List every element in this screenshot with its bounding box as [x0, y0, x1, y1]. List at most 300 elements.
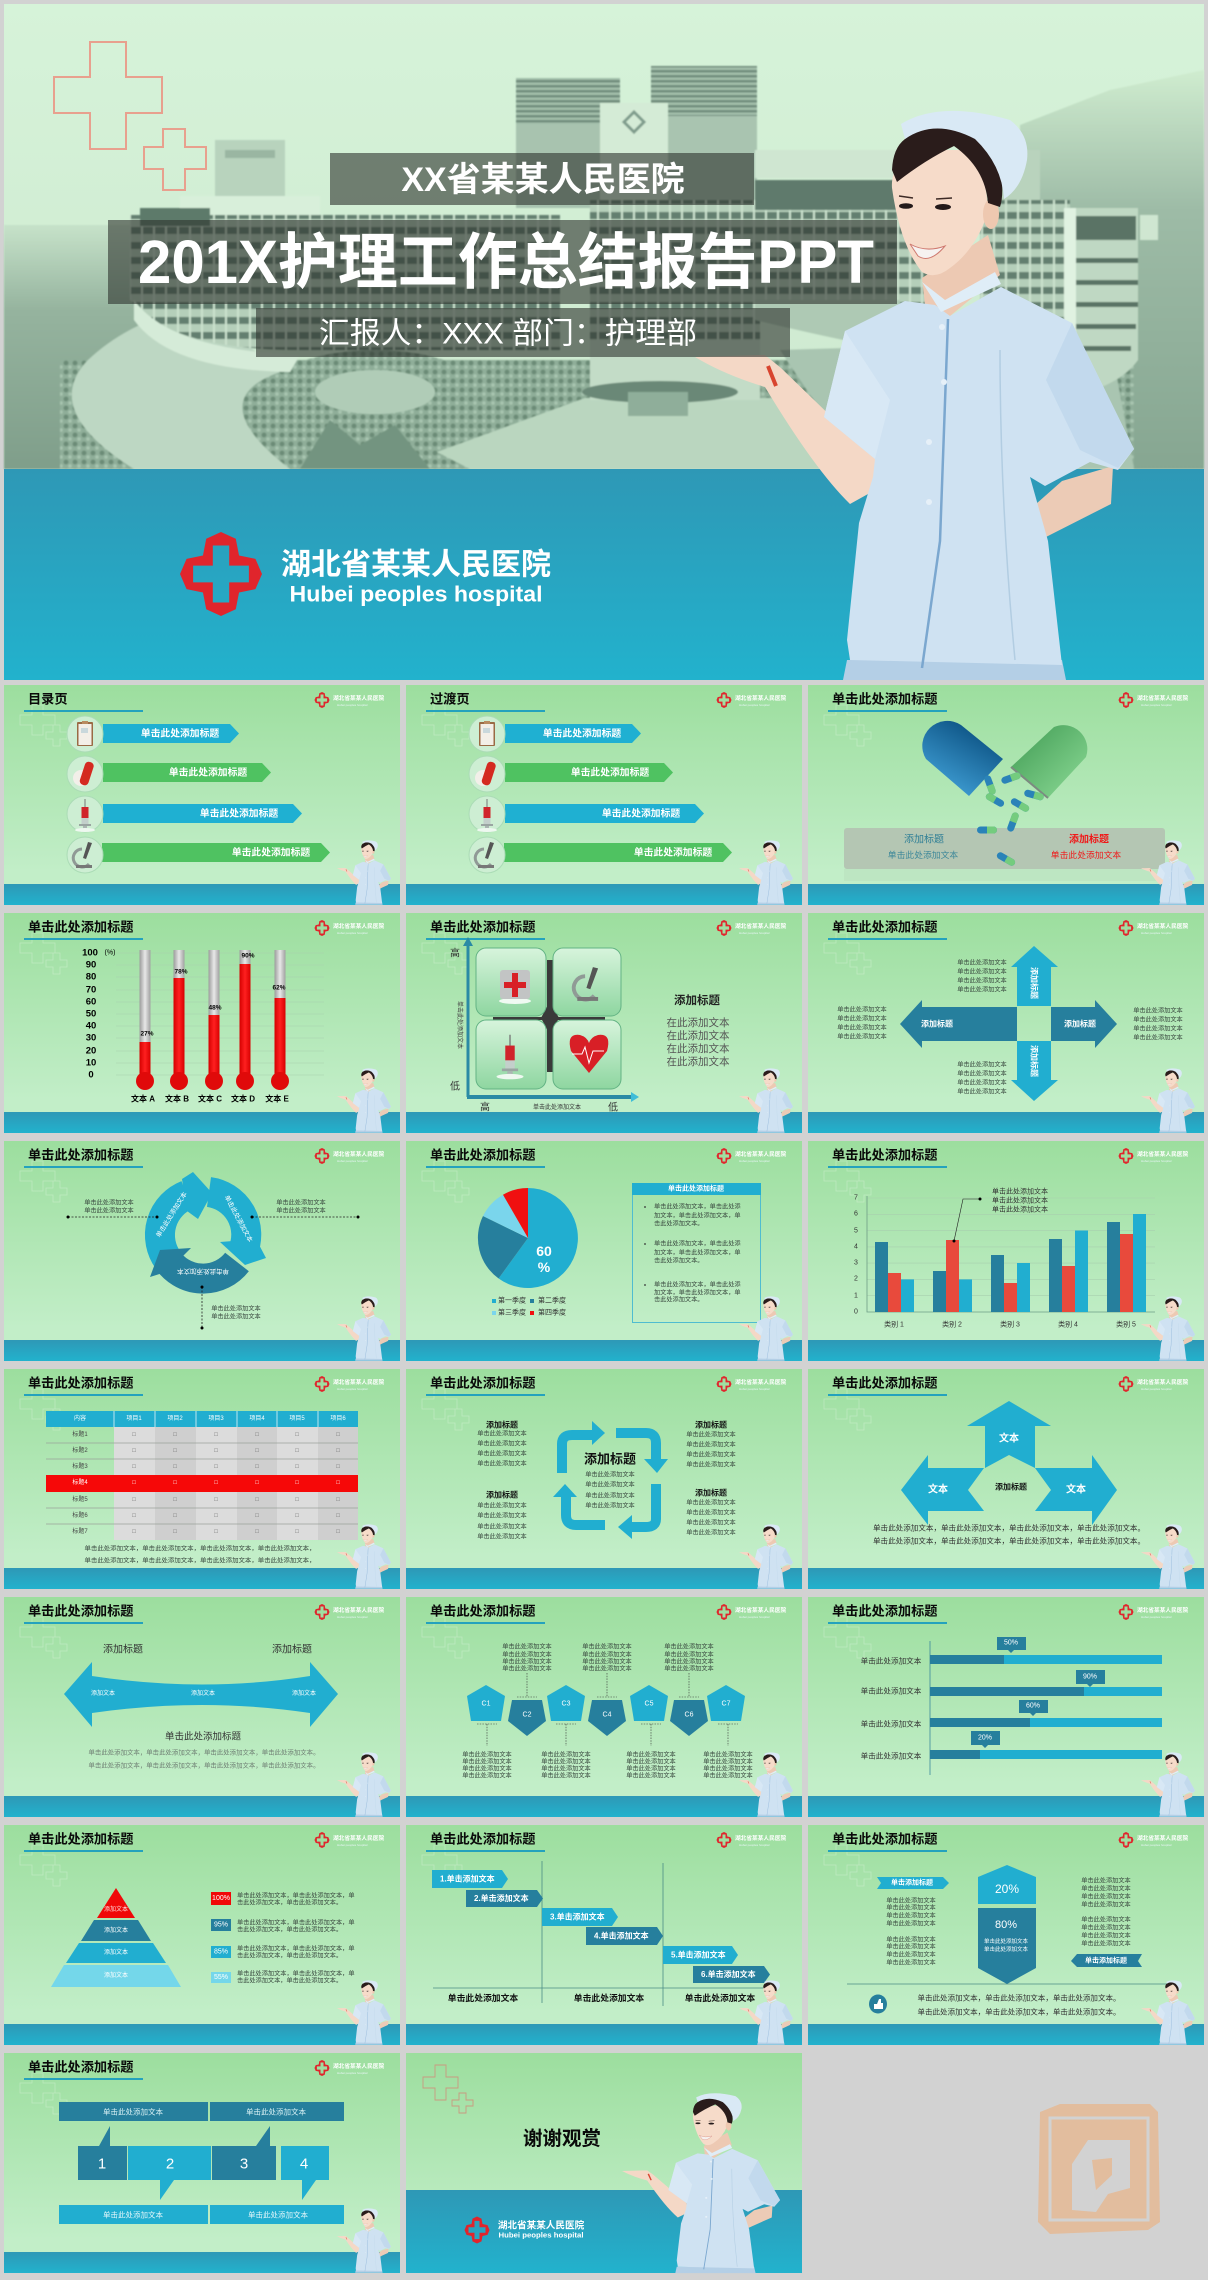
arrow down: 添加标题: [1030, 1045, 1040, 1077]
thank you text: 谢谢观赏: [523, 2127, 601, 2150]
block 4: 4: [300, 2156, 308, 2172]
thermometer D: 90%: [241, 952, 255, 960]
title: 单击此处添加标题: [28, 1146, 134, 1162]
item 95%: [211, 1918, 355, 1934]
lower texts: 单击此处添加文本: [626, 1750, 676, 1758]
logo: [314, 1604, 384, 1620]
text bottom left: 单击此处添加文本: [477, 1522, 527, 1530]
axis labels: 70: [86, 984, 96, 996]
table: □: [132, 1464, 136, 1470]
text panel: 单击此处添加文本: [888, 849, 958, 860]
caption: 单击此处添加标题: [165, 1730, 241, 1742]
logo: Hubei peoples hospital: [739, 1159, 770, 1163]
text top left: 单击此处添加文本: [477, 1460, 527, 1468]
axis labels: (%): [105, 950, 115, 956]
side text: [666, 993, 730, 1068]
hospital logo: 湖北省某某人民医院: [281, 548, 551, 582]
item 55%: 单击此处添加文本，单击此处添加文本，单: [237, 1970, 355, 1978]
step 2: 2.单击添加文本: [474, 1893, 529, 1903]
chart: [854, 1194, 1155, 1328]
text left: 单击此处添加文本: [837, 1024, 887, 1032]
three arrows: 文本: [1066, 1482, 1086, 1496]
label box: province hospital: [330, 153, 754, 205]
logo: 湖北省某某人民医院: [333, 2062, 384, 2070]
side text: 在此添加文本: [666, 1029, 730, 1042]
title: 单击此处添加标题: [832, 1146, 938, 1162]
text bottom right: 单击此处添加文本: [686, 1498, 736, 1506]
legend: 第一季度: [498, 1296, 526, 1304]
slide 6: four-way arrows: [808, 913, 1204, 1133]
upper texts: 单击此处添加文本: [582, 1658, 632, 1666]
item 100%: [211, 1892, 355, 1906]
table: □: [214, 1432, 218, 1438]
text box: 击此处添加文本。: [654, 1296, 704, 1304]
text bottom left: 单击此处添加文本: [477, 1512, 527, 1520]
lower texts: 单击此处添加文本: [626, 1764, 676, 1772]
reporter line: 汇报人：XXX 部门：护理部: [319, 318, 697, 350]
table: □: [295, 1432, 299, 1438]
hospital logo: [464, 2216, 585, 2244]
note text: 单击此处添加文本，单击此处添加文本，单击此处添加文本，单击此处添加文本，: [84, 1556, 316, 1564]
logo: 湖北省某某人民医院: [735, 1150, 786, 1158]
logo: 湖北省某某人民医院: [1137, 1150, 1188, 1158]
logo: 湖北省某某人民医院: [735, 1378, 786, 1386]
axis labels: 80: [86, 972, 96, 982]
right tag and text: 单击此处添加文本: [1081, 1884, 1131, 1892]
axis labels: [82, 948, 115, 1080]
table: 标题7: [72, 1527, 88, 1535]
center text: 单击此处添加文本: [585, 1470, 635, 1478]
logo: 湖北省某某人民医院: [333, 1378, 384, 1386]
cycle arrows: 单击此处添加文本: [154, 1190, 189, 1239]
logo: 湖北省某某人民医院: [735, 694, 786, 702]
table: □: [295, 1448, 299, 1454]
nurse: [739, 1296, 793, 1361]
thermometer C: 文本 C: [198, 1094, 222, 1104]
table: 内容: [74, 1414, 86, 1422]
lower texts: 单击此处添加文本: [462, 1772, 512, 1780]
nurse: [739, 1524, 793, 1589]
table: □: [295, 1529, 299, 1535]
slide 2: transition: [406, 685, 802, 905]
slide 10: table: [4, 1369, 400, 1589]
slide 20: thank you: [406, 2053, 802, 2273]
step 5: [663, 1946, 738, 1964]
cycle arrows: [150, 1172, 266, 1279]
top bars: [59, 2102, 344, 2121]
nurse: [337, 1296, 391, 1361]
nurse photo: [695, 111, 1134, 680]
center block: 单击此处添加文本: [984, 1937, 1028, 1945]
right tag and text: 单击此处添加文本: [1081, 1892, 1131, 1900]
table: □: [132, 1480, 136, 1486]
lower texts: 单击此处添加文本: [703, 1772, 753, 1780]
logo: Hubei peoples hospital: [739, 1843, 770, 1847]
logo: [314, 1376, 384, 1392]
center block: 80%: [995, 1919, 1017, 1931]
logo: Hubei peoples hospital: [739, 1615, 770, 1619]
text top left: 添加标题: [486, 1420, 518, 1430]
item 95%: 单击此处添加文本，单击此处添加文本，单: [237, 1918, 355, 1926]
table: □: [132, 1529, 136, 1535]
logo: 湖北省某某人民医院: [1137, 1378, 1188, 1386]
block 1: 1: [98, 2156, 106, 2172]
text box: 加文本，单击此处添加文本，单: [654, 1212, 741, 1220]
text bottom: 单击此处添加文本: [957, 1088, 1007, 1096]
arrow down: [1011, 1041, 1058, 1101]
upper texts: 单击此处添加文本: [664, 1658, 714, 1666]
left tag and text: [877, 1877, 949, 1966]
logo: 湖北省某某人民医院: [735, 1606, 786, 1614]
block 3: [212, 2126, 276, 2180]
text bottom: 单击此处添加文本: [957, 1070, 1007, 1078]
title: 单击此处添加标题: [430, 918, 536, 934]
item 95%: 95%: [214, 1922, 228, 1928]
hospital logo: 湖北省某某人民医院: [498, 2220, 585, 2232]
step 6: [693, 1966, 770, 1983]
logo: Hubei peoples hospital: [1141, 1387, 1172, 1391]
column labels: 单击此处添加文本: [448, 1992, 518, 2003]
bottom bars: 单击此处添加文本: [248, 2210, 308, 2220]
step 6: 6.单击添加文本: [701, 1969, 756, 1979]
text top right: 单击此处添加文本: [686, 1450, 736, 1458]
slide 14: pentagons: [406, 1597, 802, 1817]
table: □: [295, 1464, 299, 1470]
text panel: [844, 828, 1165, 881]
three arrows: 文本: [928, 1482, 948, 1496]
lower texts: 单击此处添加文本: [626, 1772, 676, 1780]
axis labels: 40: [86, 1020, 96, 1032]
table: 标题5: [72, 1495, 88, 1503]
item 100%: 单击此处添加文本，单击此处添加文本，单: [237, 1892, 355, 1900]
bar 90%: 单击此处添加文本: [861, 1686, 922, 1696]
icon: heart: [570, 1035, 608, 1073]
upper texts: 单击此处添加文本: [582, 1650, 632, 1658]
logo: Hubei peoples hospital: [337, 1387, 368, 1391]
nurse: [739, 1068, 793, 1133]
logo: [1118, 1376, 1188, 1392]
text top left: 单击此处添加文本: [477, 1450, 527, 1458]
logo: 湖北省某某人民医院: [735, 922, 786, 930]
logo: Hubei peoples hospital: [337, 2071, 368, 2075]
title: 单击此处添加标题: [430, 1146, 536, 1162]
item 100%: 击此处添加文本，单击此处添加文本。: [237, 1898, 342, 1906]
callout: 单击此处添加文本: [992, 1196, 1048, 1204]
center block: [978, 1865, 1036, 1984]
logo: [1118, 692, 1188, 708]
label box: province hospital: XX省某某人民医院: [401, 161, 685, 199]
three arrows: [901, 1401, 1117, 1525]
right tag and text: 单击此处添加文本: [1081, 1932, 1131, 1940]
menu item 2: [67, 756, 271, 792]
text bottom left: 单击此处添加文本: [477, 1532, 527, 1540]
menu item 1: [67, 716, 239, 752]
step 1: 1.单击添加文本: [440, 1874, 495, 1884]
text bottom right: 添加标题: [695, 1488, 727, 1498]
logo: Hubei peoples hospital: [1141, 703, 1172, 707]
center label: 添加标题: [995, 1482, 1027, 1492]
logo: [314, 1148, 384, 1164]
slide 13: double arrow: [4, 1597, 400, 1817]
left tag and text: 单击添加标题: [891, 1878, 933, 1886]
chart: 6: [854, 1210, 858, 1218]
axes: 单击此处添加文本: [533, 1103, 581, 1111]
legend: 第四季度: [538, 1308, 566, 1316]
body text: 单击此处添加文本，单击此处添加文本，单击此处添加文本，单击此处添加文本。: [873, 1522, 1145, 1532]
capsule halves: [922, 721, 1087, 798]
logo: 湖北省某某人民医院: [333, 922, 384, 930]
table: □: [214, 1448, 218, 1454]
slide 18: percentage blocks: [808, 1825, 1204, 2045]
legend: [492, 1296, 566, 1316]
table: 标题6: [72, 1511, 88, 1519]
nurse: [1141, 840, 1195, 905]
arrow right: [1051, 1000, 1117, 1048]
text bottom: 单击此处添加文本: [957, 1078, 1007, 1086]
table: 项目2: [167, 1415, 183, 1422]
bar 90%: 90%: [1083, 1674, 1097, 1680]
hospital logo: Hubei peoples hospital: [290, 582, 542, 606]
hero background: [4, 4, 1204, 469]
lower texts: 单击此处添加文本: [703, 1750, 753, 1758]
pyramid: 添加文本: [104, 1926, 128, 1934]
logo: [314, 1832, 384, 1848]
bar 50%: 50%: [1004, 1640, 1018, 1646]
logo: 湖北省某某人民医院: [333, 1150, 384, 1158]
table: □: [132, 1513, 136, 1519]
axes: 单击此处添加文本: [456, 1001, 464, 1049]
text top: 单击此处添加文本: [957, 986, 1007, 994]
axes: 高: [480, 1100, 490, 1114]
logo: 湖北省某某人民医院: [1137, 1606, 1188, 1614]
item 85%: 单击此处添加文本，单击此处添加文本，单: [237, 1944, 355, 1952]
slide 3: capsule: [808, 685, 1204, 905]
chart: 类别 1: [884, 1320, 904, 1328]
menu item 1: 单击此处添加标题: [141, 726, 219, 740]
slide 15: progress bars: [808, 1597, 1204, 1817]
caption: 单击此处添加文本，单击此处添加文本，单击此处添加文本，单击此处添加文本。: [88, 1748, 320, 1756]
item 55%: 55%: [214, 1974, 228, 1981]
thermometer A: [131, 950, 155, 1104]
chart: 类别 3: [1000, 1320, 1020, 1328]
lower texts: [462, 1750, 753, 1780]
pie: 60: [536, 1243, 552, 1259]
menu item 3: [67, 796, 302, 832]
headings: [103, 1642, 312, 1656]
block 3: 3: [240, 2156, 248, 2172]
matrix tiles: [476, 948, 621, 1089]
bar 90%: [861, 1670, 1162, 1696]
center text: [584, 1452, 636, 1510]
lower texts: 单击此处添加文本: [626, 1758, 676, 1766]
table: □: [336, 1480, 340, 1486]
step 1: [432, 1870, 508, 1888]
logo: 湖北省某某人民医院: [735, 1834, 786, 1842]
curved double arrow: 添加文本: [191, 1689, 215, 1697]
headings: 添加标题: [272, 1642, 312, 1656]
slide 11: four-step loop: [406, 1369, 802, 1589]
title: 单击此处添加标题: [430, 1830, 536, 1846]
table: □: [336, 1432, 340, 1438]
logo: Hubei peoples hospital: [1141, 1843, 1172, 1847]
hero slide: [4, 4, 1204, 680]
bar 20%: 单击此处添加文本: [861, 1750, 922, 1760]
thermometer A: 文本 A: [131, 1094, 155, 1104]
logo: [1118, 1148, 1188, 1164]
text bottom left: 单击此处添加文本: [477, 1502, 527, 1510]
blue band: [406, 2190, 802, 2273]
step 3: 3.单击添加文本: [550, 1912, 605, 1922]
logo: Hubei peoples hospital: [337, 931, 368, 935]
body text: 单击此处添加文本，单击此处添加文本，单击此处添加文本，单击此处添加文本。: [873, 1536, 1145, 1546]
text right: [1133, 1006, 1183, 1042]
callout: 单击此处添加文本: [992, 1186, 1048, 1196]
logo: Hubei peoples hospital: [337, 1843, 368, 1847]
upper texts: 单击此处添加文本: [664, 1650, 714, 1658]
menu item 3: 单击此处添加标题: [602, 806, 680, 820]
axes: 低: [450, 1080, 460, 1092]
table: □: [255, 1513, 259, 1519]
text box: 单击此处添加文本，单击此处添: [654, 1280, 741, 1288]
slide 7: cycle diagram: [4, 1141, 400, 1361]
upper texts: 单击此处添加文本: [502, 1650, 552, 1658]
title: 单击此处添加标题: [28, 1374, 134, 1390]
axes: 低: [608, 1100, 618, 1114]
logo: Hubei peoples hospital: [337, 1615, 368, 1619]
callout texts: 单击此处添加文本: [211, 1304, 261, 1312]
title: 单击此处添加标题: [832, 1602, 938, 1618]
top bars: 单击此处添加文本: [246, 2106, 306, 2116]
thermometer E: 文本 E: [265, 1094, 289, 1104]
callout texts: 单击此处添加文本: [276, 1206, 326, 1214]
lower texts: 单击此处添加文本: [541, 1750, 591, 1758]
lower texts: 单击此处添加文本: [541, 1764, 591, 1772]
upper texts: 单击此处添加文本: [582, 1642, 632, 1650]
logo: Hubei peoples hospital: [739, 703, 770, 707]
axis line: [929, 1641, 931, 1775]
upper texts: 单击此处添加文本: [664, 1664, 714, 1672]
icon: syringe: [496, 1035, 524, 1079]
top bars: 单击此处添加文本: [103, 2106, 163, 2116]
chart: 1: [854, 1292, 858, 1300]
note text: [84, 1544, 316, 1564]
table: □: [336, 1513, 340, 1519]
lower texts: 单击此处添加文本: [703, 1764, 753, 1772]
logo: [314, 2060, 384, 2076]
title: 单击此处添加标题: [832, 918, 938, 934]
title: 单击此处添加标题: [28, 918, 134, 934]
table: □: [336, 1464, 340, 1470]
text top right: 单击此处添加文本: [686, 1440, 736, 1448]
item 85%: 85%: [214, 1948, 228, 1956]
nurse: [337, 1068, 391, 1133]
text top right: 单击此处添加文本: [686, 1430, 736, 1438]
axis labels: 100: [82, 948, 98, 958]
slide 9: bar chart: [808, 1141, 1204, 1361]
thermometer E: [265, 950, 289, 1104]
table: □: [173, 1497, 177, 1503]
bar 60%: [861, 1700, 1162, 1728]
pyramid: 添加文本: [104, 1971, 128, 1979]
table: 项目5: [289, 1415, 305, 1422]
menu item 4: 单击此处添加标题: [634, 846, 712, 858]
upper texts: 单击此处添加文本: [502, 1658, 552, 1666]
thermometer B: [165, 950, 189, 1104]
arrow up: [1011, 946, 1058, 1006]
table: □: [214, 1497, 218, 1503]
leader lines: [66, 1216, 360, 1330]
logo: [1118, 920, 1188, 936]
step 4: 4.单击添加文本: [594, 1930, 649, 1940]
table: □: [255, 1448, 259, 1454]
menu item 2: [469, 756, 673, 792]
menu item 1: [469, 716, 641, 752]
text bottom right: [686, 1488, 736, 1536]
callout: 单击此处添加文本: [992, 1204, 1048, 1214]
lower texts: 单击此处添加文本: [541, 1772, 591, 1780]
bar 20%: 20%: [978, 1734, 992, 1742]
axes: 高: [450, 946, 460, 960]
text bottom: [957, 1060, 1007, 1096]
center text: 单击此处添加文本: [585, 1502, 635, 1510]
table: □: [173, 1529, 177, 1535]
step 3: [542, 1908, 618, 1926]
table: □: [255, 1497, 259, 1503]
block 4: [281, 2146, 329, 2200]
slide 19: numbered blocks: [4, 2053, 400, 2273]
item 85%: [211, 1944, 355, 1960]
logo: 湖北省某某人民医院: [333, 694, 384, 702]
column labels: 单击此处添加文本: [574, 1992, 644, 2003]
title: 单击此处添加标题: [28, 2058, 134, 2074]
callout: [952, 1186, 1048, 1242]
text box: 加文本，单击此处添加文本，单: [654, 1288, 741, 1296]
center block: 单击此处添加文本: [984, 1945, 1028, 1953]
right tag and text: [1071, 1876, 1142, 1967]
chart: 7: [854, 1194, 858, 1202]
pyramid: 添加文本: [104, 1948, 128, 1956]
text left: 单击此处添加文本: [837, 1032, 887, 1040]
upper texts: 单击此处添加文本: [582, 1664, 632, 1672]
title: 单击此处添加标题: [832, 690, 938, 706]
logo: [314, 692, 384, 708]
pentagons: C4: [603, 1712, 612, 1718]
table: □: [132, 1448, 136, 1454]
axis labels: 50: [86, 1008, 96, 1020]
axis labels: 30: [86, 1032, 96, 1044]
main title: 201X护理工作总结报告PPT: [138, 228, 874, 296]
left tag and text: 单击此处添加文本: [886, 1920, 936, 1928]
body text: [873, 1522, 1145, 1546]
axis labels: 10: [86, 1058, 96, 1068]
table: 标题1: [72, 1430, 88, 1438]
bar 50%: 单击此处添加文本: [861, 1656, 922, 1666]
logo: 湖北省某某人民医院: [1137, 694, 1188, 702]
thermometer D: 文本 D: [231, 1094, 255, 1104]
column labels: 单击此处添加文本: [685, 1992, 755, 2003]
text box: 击此处添加文本。: [654, 1220, 704, 1228]
table: 项目1: [126, 1415, 142, 1422]
text right: 单击此处添加文本: [1133, 1024, 1183, 1032]
block 1: [78, 2126, 127, 2180]
headings: 添加标题: [103, 1642, 143, 1656]
upper texts: 单击此处添加文本: [502, 1664, 552, 1672]
side text: 在此添加文本: [666, 1016, 730, 1029]
title: 目录页: [28, 692, 68, 706]
text right: 单击此处添加文本: [1133, 1016, 1183, 1024]
side text: 在此添加文本: [666, 1055, 730, 1068]
item 55%: 击此处添加文本，单击此处添加文本。: [237, 1976, 342, 1984]
